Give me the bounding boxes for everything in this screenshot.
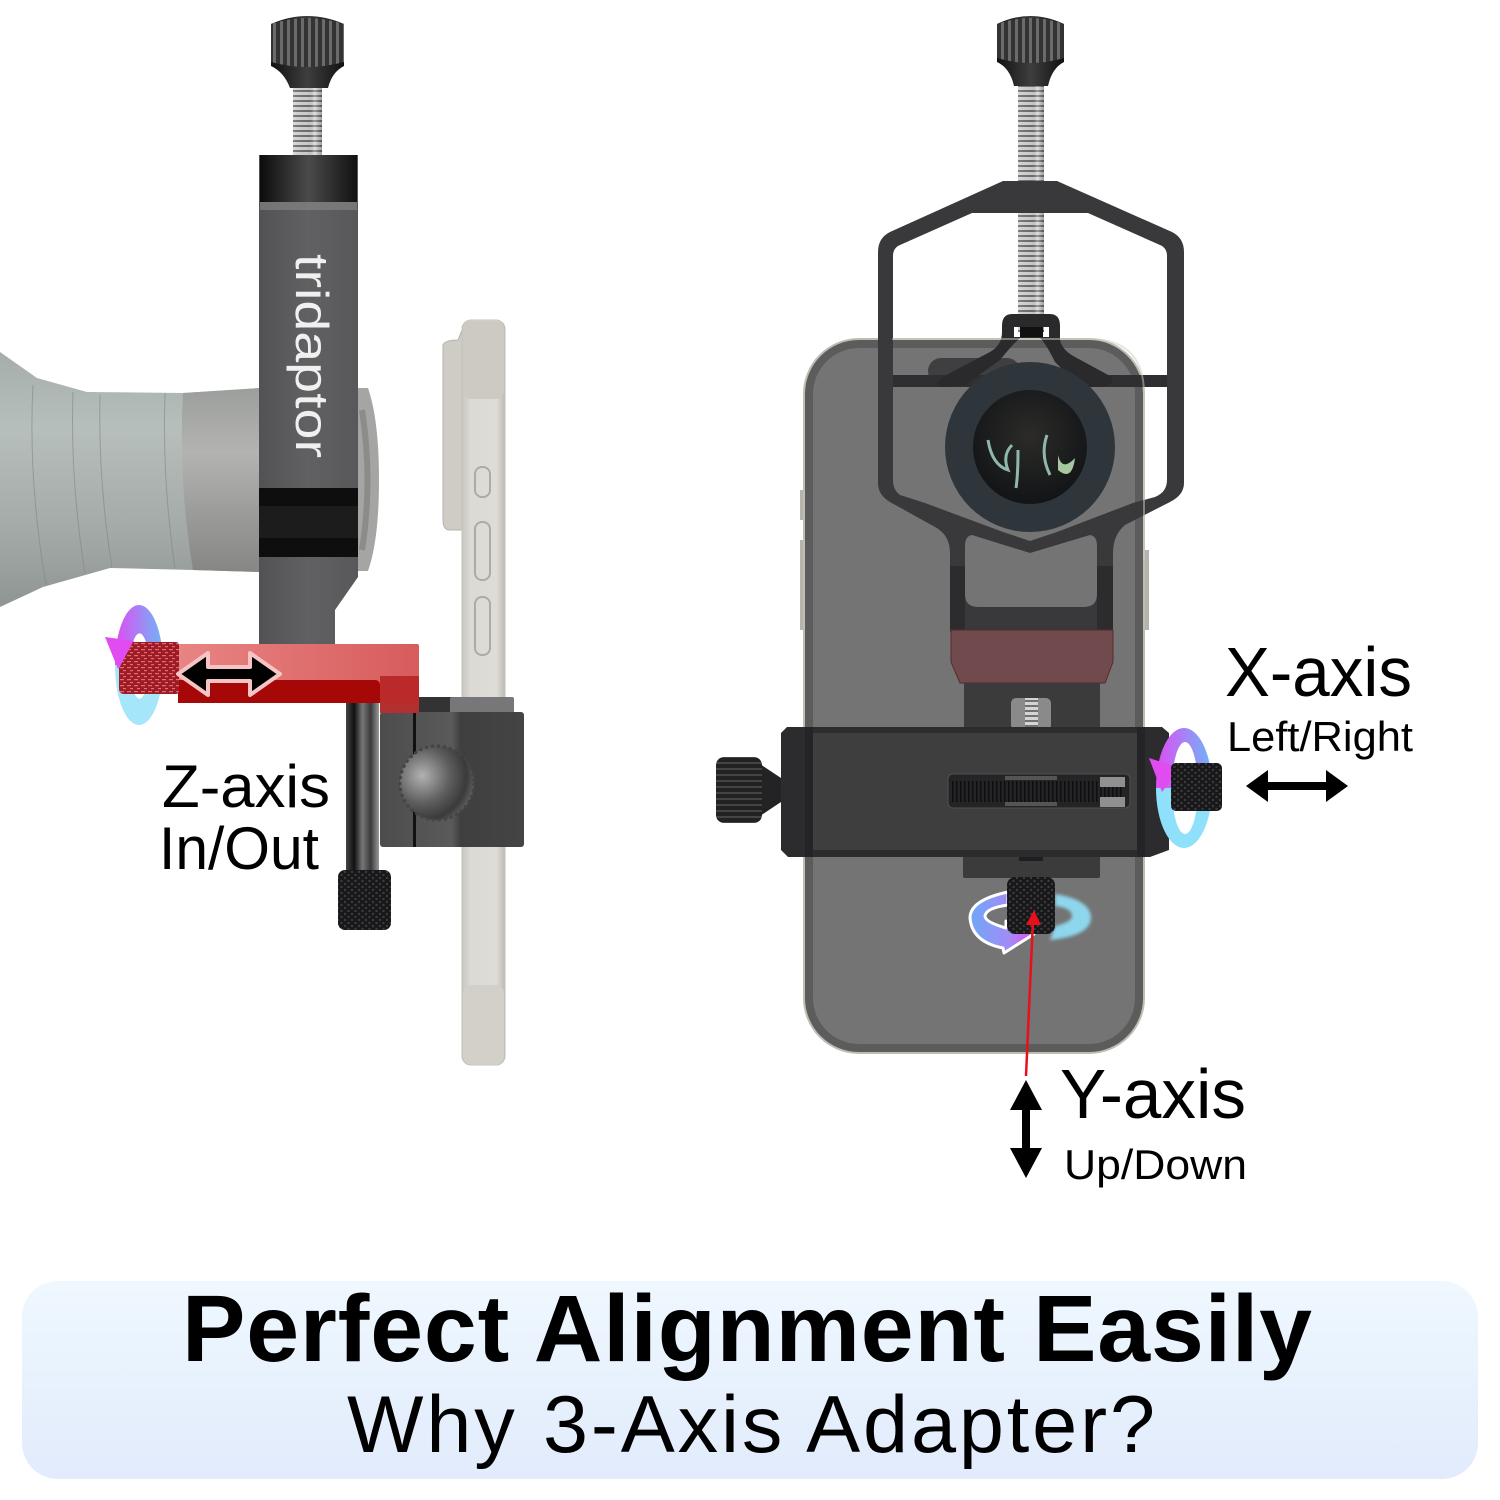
label: Y-axis: Up/Down <box>1064 1141 1247 1188</box>
brand text: tridaptor <box>286 254 338 458</box>
clamp body with brand <box>259 155 358 645</box>
double arrow: Z-axis <box>178 653 280 695</box>
top screw knob <box>271 16 344 157</box>
banner subheading: Why 3-Axis Adapter? <box>347 1380 1155 1470</box>
label: Y-axis: Y-axis <box>1060 1055 1246 1133</box>
bottom knob with rotate arrow <box>970 877 1091 953</box>
label: Z-axis: Z-axis <box>162 753 330 820</box>
label: Z-axis <box>159 753 330 882</box>
label: Z-axis: In/Out <box>159 815 319 882</box>
rotate arrow: X-axis knob <box>1149 728 1222 848</box>
label: X-axis: X-axis <box>1225 633 1412 711</box>
rotate arrow: Z-axis knob <box>105 605 163 725</box>
banner: Perfect Alignment Easily <box>22 1276 1478 1479</box>
phone clamp bar <box>716 727 1169 857</box>
camera lens <box>945 362 1115 532</box>
double arrow: Y-axis <box>1010 1080 1042 1178</box>
red Z-axis slider <box>119 642 419 713</box>
left illustration: side view of adapter on spotting scope <box>0 16 524 1065</box>
spotting scope <box>0 352 379 607</box>
phone side profile <box>443 320 505 1065</box>
phone edge seen through frame <box>892 339 1144 560</box>
red slider <box>951 630 1113 683</box>
phone <box>800 338 1149 1054</box>
banner heading: Perfect Alignment Easily <box>182 1276 1312 1382</box>
stem <box>963 683 1100 878</box>
red pointer line <box>1026 910 1041 1076</box>
right illustration: front view of adapter with phone <box>716 16 1413 1188</box>
top screw knob <box>997 16 1064 332</box>
double arrow: X-axis <box>1246 770 1348 802</box>
label: X-axis: Left/Right <box>1227 713 1413 760</box>
label: X-axis <box>1225 633 1413 760</box>
phone clamp <box>338 697 524 930</box>
metal frame <box>878 181 1184 632</box>
label: Y-axis <box>1060 1055 1247 1188</box>
